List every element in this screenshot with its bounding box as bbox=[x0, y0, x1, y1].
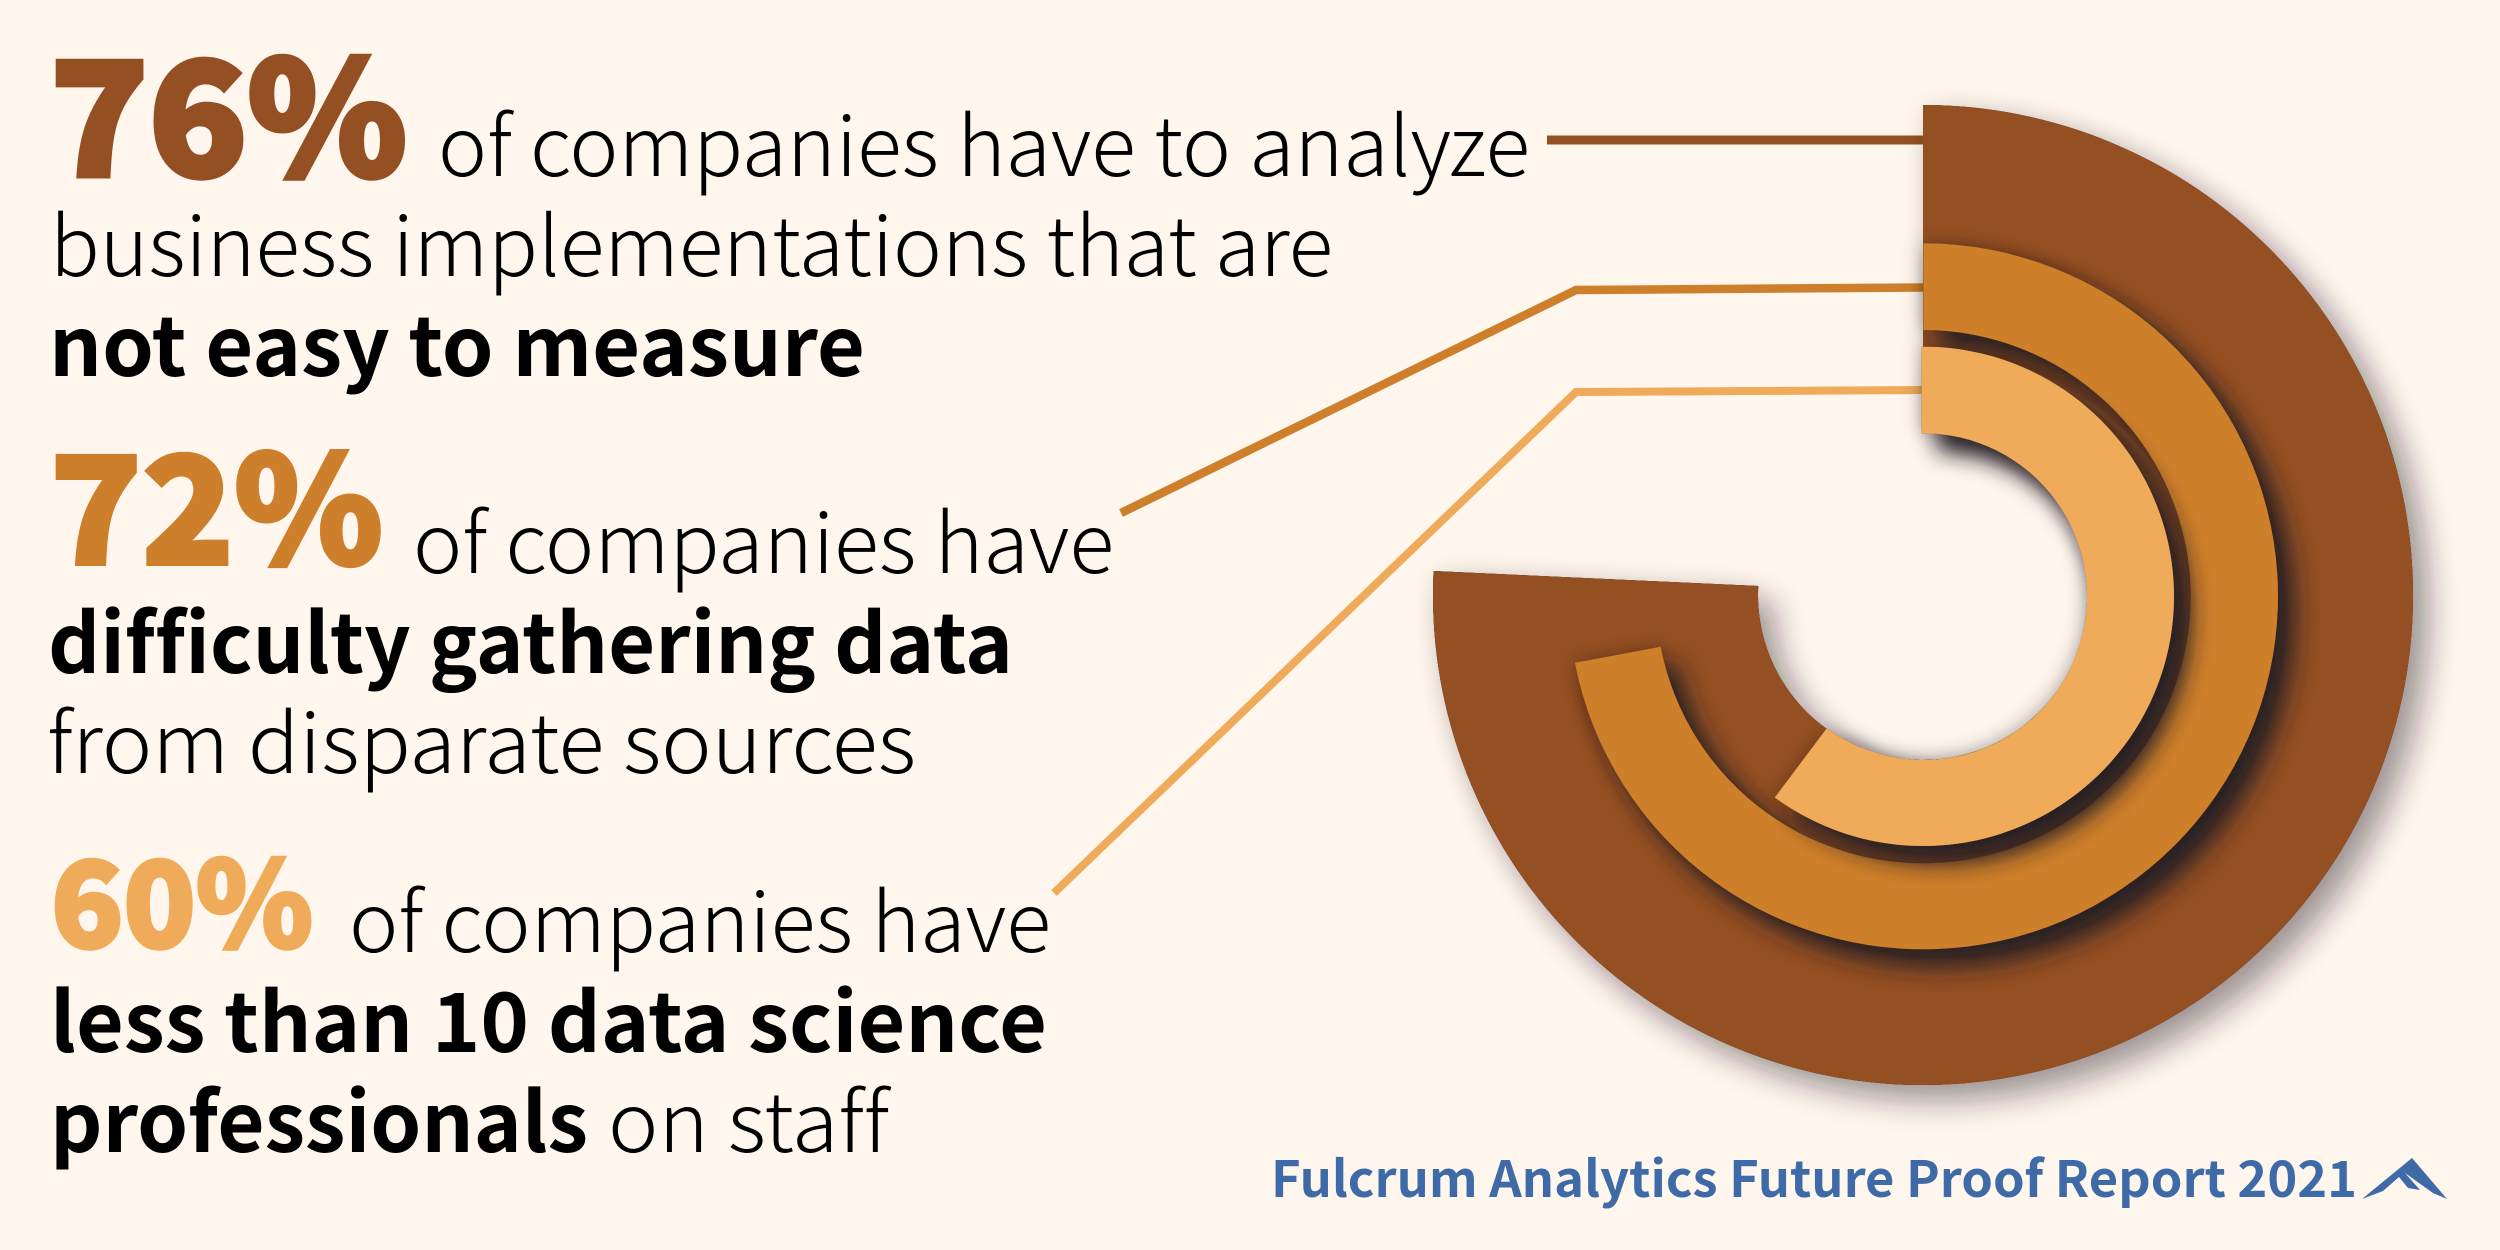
bold text: professionals: professionals bbox=[50, 1057, 588, 1176]
bold text line: less than 10 data science bbox=[50, 957, 1047, 1076]
text line: of companies have bbox=[349, 857, 1051, 976]
leader line: 76% bbox=[1547, 136, 1925, 144]
bold text line: not easy to measure bbox=[49, 281, 865, 400]
bold text line: difficulty gathering data bbox=[48, 578, 1013, 697]
text line: of companies have to analyze bbox=[438, 81, 1530, 200]
text: on staff: on staff bbox=[608, 1057, 892, 1176]
text line: business implementations that are bbox=[50, 181, 1333, 300]
icon: mountain logo bbox=[2362, 1158, 2447, 1199]
stat block: 60% bbox=[50, 810, 1051, 1176]
leader line: 72% bbox=[1121, 288, 1925, 513]
figure: 60%: 60% bbox=[51, 810, 313, 982]
figure: 72%: 72% bbox=[50, 391, 383, 607]
inner ring: 60% bbox=[1775, 347, 2174, 846]
text line: from disparate sources bbox=[47, 678, 916, 797]
stat block: 72% bbox=[47, 391, 1114, 797]
radial bar chart bbox=[1433, 105, 2413, 1085]
middle ring: 72% bbox=[1575, 243, 2278, 949]
stat block: 76% bbox=[49, 0, 1530, 400]
source credit: Fulcrum Analytics Future Proof Report 2021 bbox=[1271, 1140, 2357, 1212]
text line: of companies have bbox=[413, 478, 1114, 597]
outer ring: 76% bbox=[1433, 105, 2413, 1085]
leader line: 60% bbox=[1054, 390, 1925, 893]
